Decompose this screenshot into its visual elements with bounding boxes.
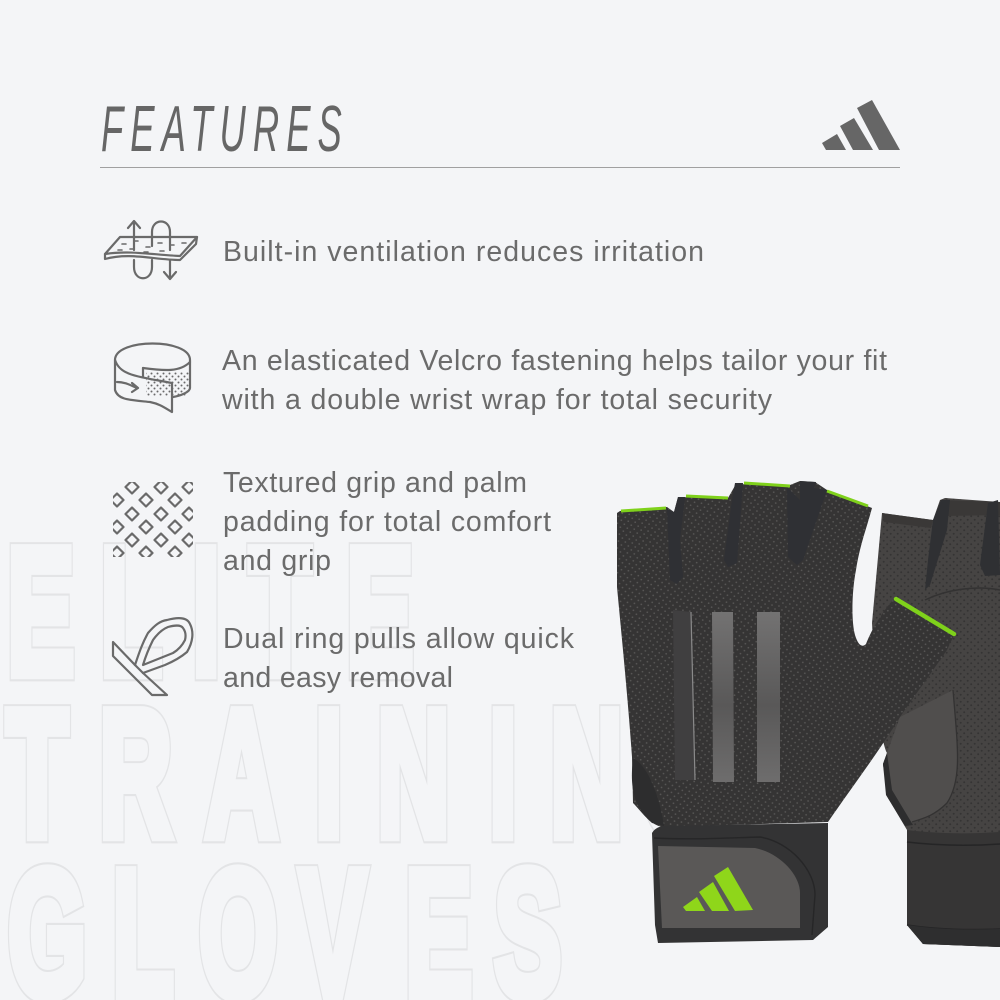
- thumb green trim: [896, 599, 954, 634]
- icon: ring pull: [113, 618, 192, 695]
- green trims: [621, 483, 868, 511]
- finger gussets: [667, 481, 827, 584]
- feature text: ring pulls: [223, 623, 575, 694]
- feature text: textured grip: and grip: [223, 545, 331, 577]
- cuff patch: [658, 846, 800, 928]
- feature text: velcro fastening: An elasticated Velcro fastening helps tailor your fit: [222, 345, 887, 377]
- ring pull loop: [632, 758, 664, 826]
- front glove: back of hand: [617, 481, 955, 943]
- feature text: textured grip: padding for total comfort: [223, 506, 551, 538]
- icon: wrist wrap: [115, 344, 190, 412]
- rear wrist cuff: [907, 830, 1000, 947]
- feature text: ring pulls: Dual ring pulls allow quick: [223, 623, 575, 655]
- feature text: ring pulls: and easy removal: [223, 662, 453, 694]
- title divider: [100, 167, 900, 168]
- feature text: textured grip: [223, 467, 551, 577]
- background outline text: ELITE TRAINING GLOVES: TRAINING: [6, 673, 719, 875]
- stripes: [673, 610, 695, 780]
- rear glove: palm side: [872, 498, 1000, 947]
- icon: textured grip pattern: [113, 482, 193, 557]
- background outline text: ELITE TRAINING GLOVES: TRAINING: [6, 673, 719, 875]
- feature text: velcro fastening: with a double wrist wrap for total security: [221, 384, 773, 416]
- wrist cuff: [652, 823, 828, 943]
- feature text: ventilation: Built-in ventilation reduces irritation: [223, 236, 704, 268]
- icon: ventilation fabric: [105, 221, 197, 279]
- glove body mesh: [617, 481, 955, 827]
- title: FEATURES: FEATURES: [101, 93, 342, 166]
- green logo: [683, 867, 753, 911]
- background outline text: ELITE TRAINING GLOVES: ELITE: [7, 511, 414, 713]
- logo: three stripes grey: [822, 100, 900, 150]
- feature text: textured grip: Textured grip and palm: [223, 467, 527, 499]
- palm pad: [883, 690, 958, 825]
- feature text: velcro fastening: [221, 345, 887, 416]
- background outline text: ELITE TRAINING GLOVES: ELITE: [7, 511, 414, 713]
- background outline text: ELITE TRAINING GLOVES: [6, 511, 719, 1000]
